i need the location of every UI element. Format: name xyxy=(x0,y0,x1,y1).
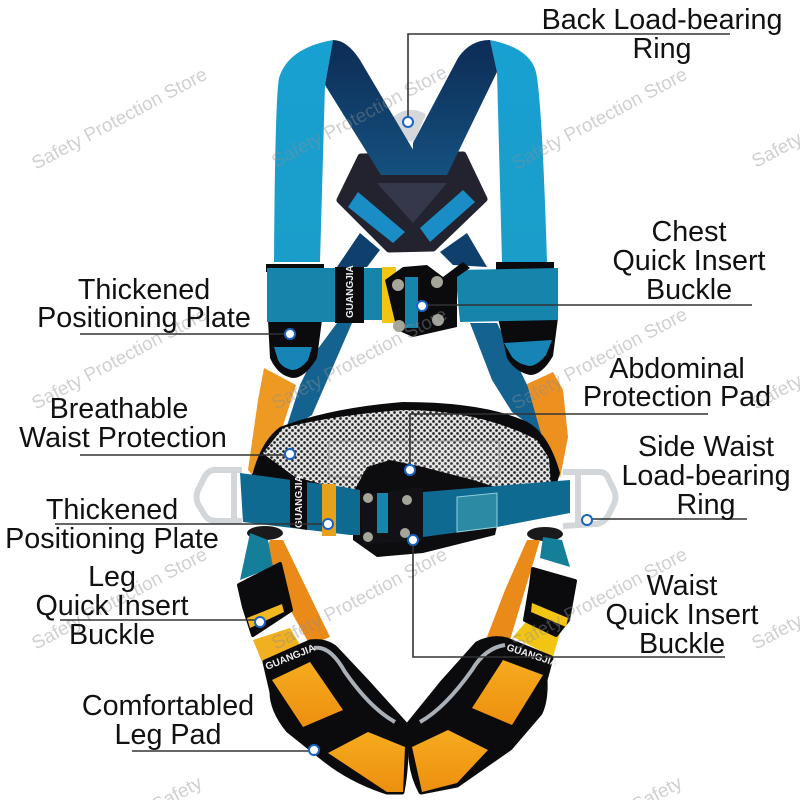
shoulder strap: right dark xyxy=(412,40,497,175)
back load-bearing ring xyxy=(392,110,426,142)
plate slot: right xyxy=(420,190,475,242)
leg strap: right teal xyxy=(540,537,570,567)
callout: chest quick insert buckle xyxy=(417,216,766,311)
callout: waist quick insert buckle: Quick Insert xyxy=(605,599,759,631)
lower buckle backing xyxy=(353,460,505,557)
waist belt brand tag xyxy=(290,475,307,530)
pad brand tag: GUANGJIA xyxy=(264,643,317,673)
leg pad: left xyxy=(264,642,406,792)
callout: abdominal protection pad: Protection Pad xyxy=(583,381,771,413)
callout: back load-bearing ring: Back Load-bearing xyxy=(542,4,782,36)
breathable mesh xyxy=(263,410,551,492)
chest band xyxy=(266,262,558,323)
callout: chest quick insert buckle: Quick Insert xyxy=(612,245,766,277)
waist pad xyxy=(253,402,560,500)
watermarks: Safety Protection Store xyxy=(28,544,211,654)
callout: comfortabled leg pad: Comfortabled xyxy=(82,690,254,722)
callout: waist quick insert buckle xyxy=(408,535,759,660)
callout: comfortabled leg pad: Leg Pad xyxy=(115,719,221,751)
leg strap: left yellow xyxy=(253,628,300,662)
shoulder strap: left light blue xyxy=(274,40,333,262)
chest band brand tag: GUANGJIA xyxy=(345,265,356,318)
leg pad: right xyxy=(409,639,559,792)
leg buckle: right xyxy=(525,569,575,635)
shoulder strap: left dark xyxy=(325,40,428,175)
shoulder strap: right light blue xyxy=(490,40,547,262)
lower chest strap: left xyxy=(285,323,352,432)
lower chest strap: right xyxy=(470,323,545,436)
callout: chest quick insert buckle: Chest xyxy=(652,216,726,248)
callout: thickened positioning plate (upper): Positioning Plate xyxy=(37,302,251,334)
callout: thickened positioning plate (upper) xyxy=(37,274,295,339)
callout: abdominal protection pad: Abdominal xyxy=(609,353,745,385)
callout: side waist load-bearing ring: Side Waist xyxy=(638,431,774,463)
plate centre xyxy=(377,183,447,223)
watermarks: Safety Protection Store xyxy=(508,544,691,654)
lower dark strap: left xyxy=(337,233,380,267)
leg strap: right orange xyxy=(487,540,540,640)
callout: chest quick insert buckle: Buckle xyxy=(646,274,732,306)
chest band brand tag xyxy=(335,265,364,323)
callout: thickened positioning plate (lower): Positioning Plate xyxy=(5,523,219,555)
callout: breathable waist protection: Breathable xyxy=(50,393,188,425)
callout: breathable waist protection xyxy=(19,393,295,459)
waist left black wedge xyxy=(248,455,345,530)
callout: side waist load-bearing ring: Ring xyxy=(676,489,736,521)
D-ring: left side xyxy=(196,470,242,521)
callout: side waist load-bearing ring: Load-bearing xyxy=(621,460,791,492)
leg strap: right yellow xyxy=(513,617,560,657)
callout: comfortabled leg pad xyxy=(82,690,319,755)
callout: abdominal protection pad xyxy=(405,353,771,475)
orange strap: upper left xyxy=(248,368,296,478)
callout: back load-bearing ring: Ring xyxy=(632,33,692,65)
watermarks: Safety Protection Store xyxy=(508,64,691,174)
callout: thickened positioning plate (lower): Thickened xyxy=(46,494,178,526)
plate slot: left xyxy=(348,192,405,243)
leg buckle: left xyxy=(239,564,291,635)
callout: leg quick insert buckle: Leg xyxy=(88,561,136,593)
leg strap: left teal xyxy=(240,533,273,580)
callout: waist quick insert buckle: Waist xyxy=(647,570,717,602)
callout: thickened positioning plate (upper): Thickened xyxy=(78,274,210,306)
chest buckle xyxy=(385,262,470,337)
callout: leg quick insert buckle xyxy=(35,561,265,651)
callout: breathable waist protection: Waist Protection xyxy=(19,422,227,454)
watermarks: Safety Protection Store xyxy=(28,64,211,174)
watermarks: Safety Protection Store xyxy=(268,304,451,414)
D-plate: right xyxy=(498,318,558,375)
waist belt xyxy=(240,473,570,537)
callout: side waist load-bearing ring xyxy=(582,431,791,525)
waist belt brand tag: GUANGJIA xyxy=(294,475,305,528)
watermarks: Safety Protection Store xyxy=(268,544,451,654)
orange strap: upper right xyxy=(527,372,568,478)
D-plate: left xyxy=(268,320,322,378)
watermarks: Safety Protection Store xyxy=(508,304,691,414)
callout: back load-bearing ring xyxy=(403,4,782,127)
waist lower black tabs xyxy=(247,526,563,541)
lower dark strap: right xyxy=(440,233,487,267)
callout: thickened positioning plate (lower) xyxy=(5,494,333,555)
watermarks: Safety Protection Store xyxy=(28,304,211,414)
pad brand tag: GUANGJIA xyxy=(505,642,559,669)
stitched rectangle xyxy=(329,441,499,477)
back plate xyxy=(340,155,484,249)
leg strap: left orange xyxy=(262,540,330,645)
callout: leg quick insert buckle: Quick Insert xyxy=(35,590,189,622)
D-ring: right side xyxy=(563,472,616,526)
watermarks: Safety Protection Store xyxy=(268,62,451,172)
callout: waist quick insert buckle: Buckle xyxy=(639,628,725,660)
stitched square xyxy=(457,493,497,532)
callout: leg quick insert buckle: Buckle xyxy=(69,619,155,651)
waist buckle xyxy=(360,487,423,545)
